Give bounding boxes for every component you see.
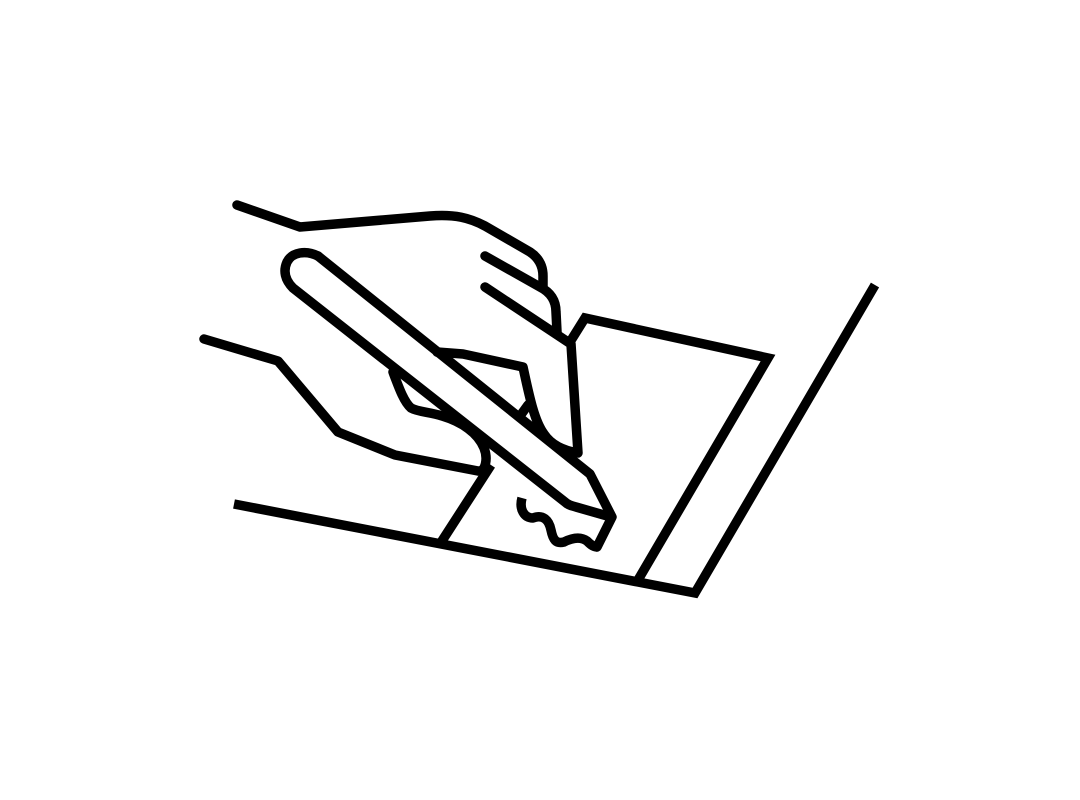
ink squiggle: [521, 498, 597, 547]
upper hand and fingers: [237, 205, 578, 453]
paper sheet: [440, 318, 768, 580]
lower hand and palm: [204, 339, 486, 471]
desk surface edge: [234, 285, 875, 593]
pen: [285, 253, 612, 547]
